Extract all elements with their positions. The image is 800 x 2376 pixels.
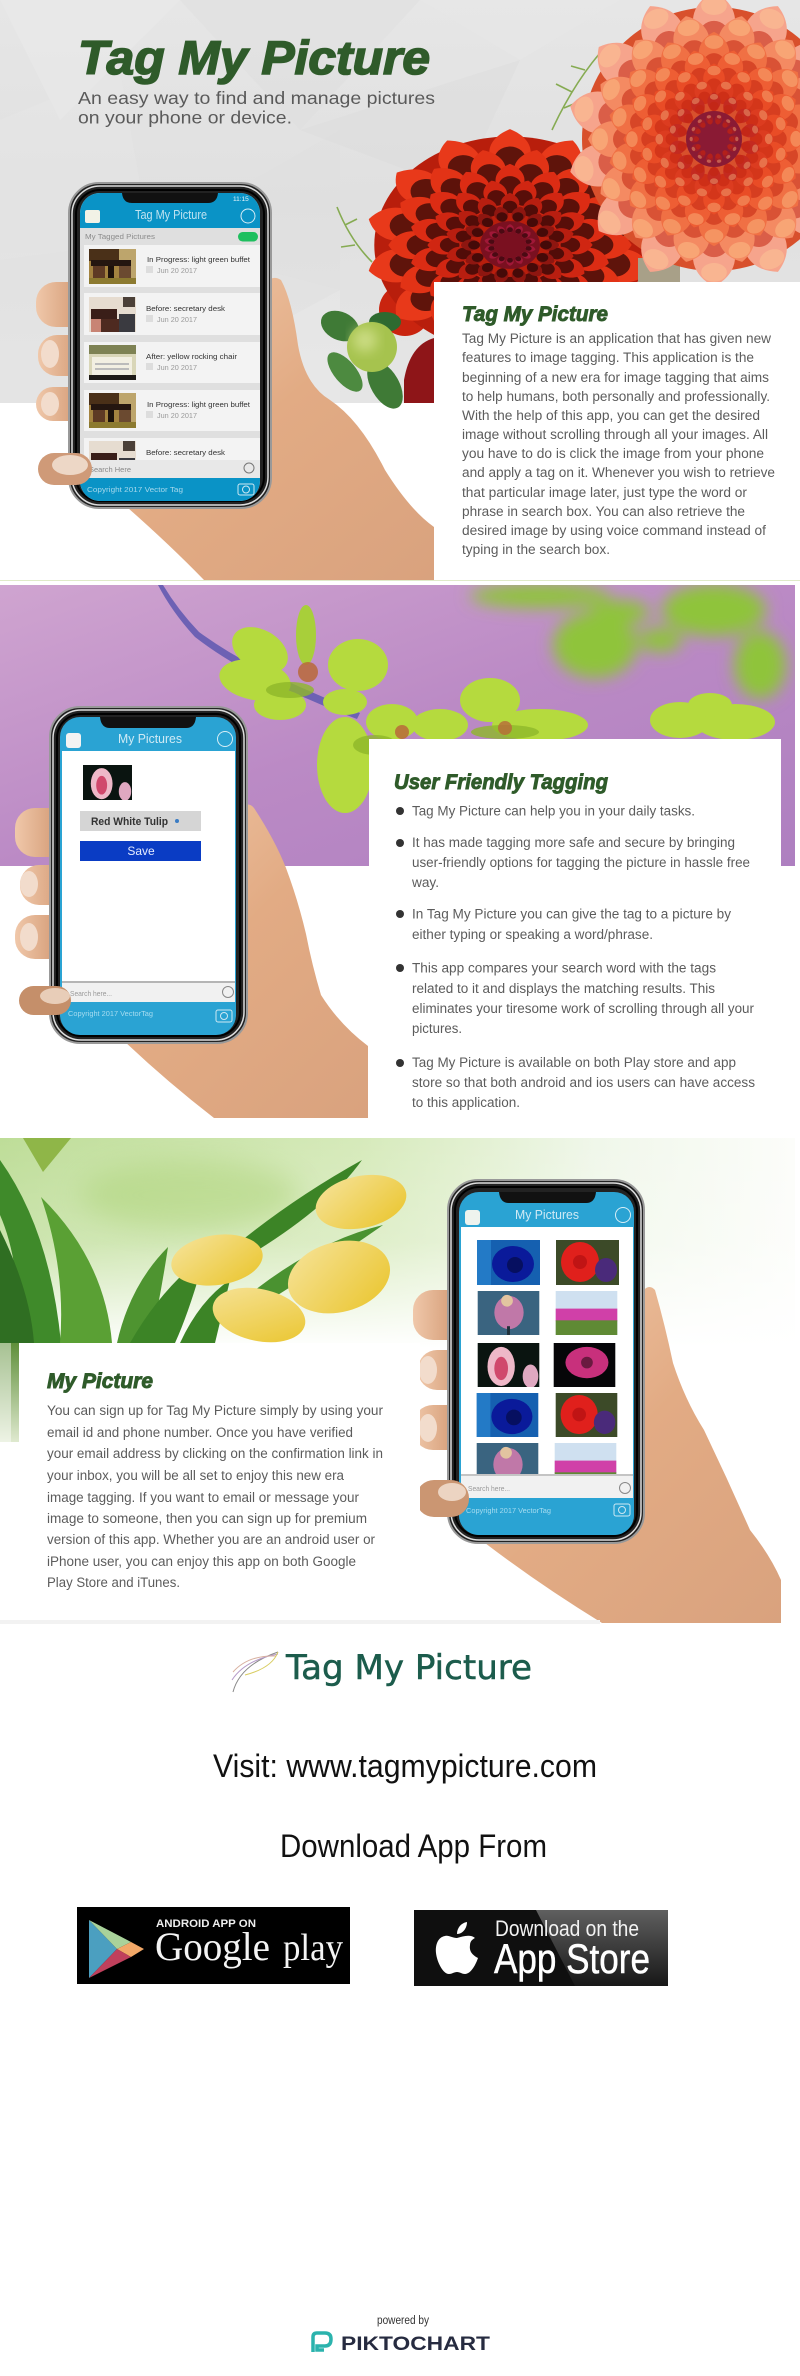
badge: App Store: Download on the bbox=[495, 1916, 639, 1941]
phone: tag entry screen: My Pictures bbox=[118, 732, 182, 746]
logo: Tag My Picture: Tag My Picture bbox=[285, 1648, 532, 1688]
body text bbox=[462, 331, 775, 557]
phone: tag entry screen: Red White Tulip bbox=[91, 816, 168, 828]
background: purple with green blossoms bbox=[0, 584, 795, 866]
body text: that particular image later, just type the word or bbox=[462, 485, 748, 500]
body text: version of this app. Whether you are an android user or bbox=[47, 1532, 376, 1547]
badge: Google Play: Google bbox=[155, 1924, 270, 1969]
body text bbox=[47, 1403, 384, 1590]
phone: tag entry screen: Copyright 2017 VectorTag bbox=[68, 1011, 153, 1018]
bullet list: This app compares your search word with the tags bbox=[412, 960, 716, 976]
badge: App Store: App Store bbox=[494, 1935, 650, 1982]
title: Tag My Picture bbox=[78, 31, 430, 84]
bullet list: way. bbox=[411, 875, 439, 890]
illustration: yellow tulips bbox=[168, 1167, 411, 1350]
bullet list: pictures. bbox=[412, 1021, 462, 1036]
phone: tagged pictures list: Before: secretary desk bbox=[146, 448, 225, 457]
phone: tagged pictures list: After: yellow rocking chair bbox=[146, 352, 237, 361]
illustration: hand holding phone bbox=[36, 278, 434, 580]
body text: features to image tagging. This application is the bbox=[462, 350, 754, 365]
body text: beginning of a new era for image tagging that aims bbox=[462, 370, 769, 385]
icon: apple bbox=[436, 1922, 478, 1974]
hero background: grey low-poly bbox=[0, 0, 800, 403]
heading: Tag My Picture bbox=[462, 303, 608, 326]
phone: tagged pictures list: Jun 20 2017 bbox=[157, 413, 197, 420]
phone: tagged pictures list bbox=[69, 183, 271, 508]
phone: picture grid: Search here... bbox=[468, 1484, 510, 1493]
illustration: hand holding phone bbox=[15, 804, 368, 1118]
bullet list bbox=[396, 804, 755, 1110]
website link: Visit: www.tagmypicture.com bbox=[213, 1748, 597, 1784]
badge: Google Play bbox=[77, 1907, 350, 1984]
illustration: thumb over phone bbox=[416, 1480, 469, 1517]
body text: you have to do is click the image from your phone bbox=[462, 446, 764, 461]
phone: tagged pictures list: Jun 20 2017 bbox=[157, 268, 197, 275]
heading: User Friendly Tagging bbox=[394, 770, 608, 794]
bullet list: user-friendly options for tagging the picture in hassle free bbox=[412, 855, 750, 870]
body text: Play Store and iTunes. bbox=[47, 1575, 180, 1590]
footer: Piktochart credit: PIKTOCHART bbox=[341, 2334, 490, 2355]
phone: picture grid bbox=[448, 1180, 644, 1543]
download heading: Download App From bbox=[280, 1828, 547, 1864]
panel: my picture text bbox=[19, 1343, 420, 1620]
icon: feather bbox=[232, 1652, 278, 1692]
phone: tagged pictures list: Before: secretary desk bbox=[146, 304, 225, 313]
bullet list: Tag My Picture is available on both Play store and app bbox=[412, 1055, 736, 1070]
phone: tagged pictures list: 11:15 bbox=[233, 196, 249, 203]
body text: desired image by using voice command instead of bbox=[462, 523, 766, 538]
body text: and apply a tag on it. Whenever you wish to retrieve bbox=[462, 465, 775, 480]
badge: Google Play: play bbox=[283, 1927, 343, 1969]
illustration: red dahlia bbox=[368, 129, 643, 336]
heading: My Picture bbox=[47, 1370, 153, 1393]
bullet list: store so that both android and ios users can have access bbox=[412, 1075, 755, 1090]
phone: tagged pictures list: Copyright 2017 Vector Tag bbox=[87, 485, 183, 494]
phone: tag entry screen: Save bbox=[127, 844, 155, 858]
body text: Tag My Picture is an application that has given new bbox=[462, 331, 771, 346]
body text: typing in the search box. bbox=[462, 542, 610, 557]
illustration: tulip leaves bbox=[0, 1138, 383, 1442]
body text: email id and phone number. Once you have verified bbox=[47, 1425, 353, 1440]
illustration: leaves and green bud bbox=[316, 305, 434, 415]
divider line bbox=[0, 580, 800, 581]
phone: tagged pictures list: Jun 20 2017 bbox=[157, 365, 197, 372]
icon: leaf sprigs bbox=[337, 45, 607, 262]
bullet list: related to it and displays the matching results. This bbox=[412, 981, 715, 996]
footer: Piktochart credit bbox=[313, 2315, 490, 2355]
illustration: hand holding phone bbox=[413, 1287, 781, 1623]
phone: tagged pictures list: In Progress: light green buffet bbox=[147, 400, 251, 409]
subtitle: An easy way to find and manage pictures bbox=[78, 88, 435, 108]
image grid bbox=[477, 1240, 619, 1487]
badge: Google Play: ANDROID APP ON bbox=[156, 1918, 256, 1930]
phone: tagged pictures list: My Tagged Pictures bbox=[85, 232, 155, 241]
panel: user friendly tagging section bbox=[0, 584, 800, 1118]
body text: You can sign up for Tag My Picture simply by using your bbox=[47, 1403, 384, 1418]
body text: image without scrolling through all your images. All bbox=[462, 427, 768, 442]
bullet list: to this application. bbox=[412, 1095, 520, 1110]
body text: iPhone user, you can enjoy this app on both Google bbox=[47, 1554, 356, 1569]
bullet list: either typing or speaking a word/phrase. bbox=[412, 927, 653, 942]
body text: phrase in search box. You can also retrieve the bbox=[462, 504, 745, 519]
icon: Piktochart mark bbox=[313, 2333, 331, 2352]
body text: your email address by clicking on the confirmation link in bbox=[47, 1446, 383, 1461]
bullet list: It has made tagging more safe and secure by bringing bbox=[412, 835, 735, 850]
panel: Tag My Picture description bbox=[434, 282, 800, 580]
panel: user friendly tagging text bbox=[369, 739, 800, 1118]
phone: tagged pictures list: Jun 20 2017 bbox=[157, 317, 197, 324]
bullet list: Tag My Picture can help you in your daily tasks. bbox=[412, 804, 695, 818]
body text: With the help of this app, you can get the desired bbox=[462, 408, 760, 423]
phone: tag entry screen bbox=[50, 707, 247, 1043]
panel: my picture section bbox=[0, 1138, 795, 1624]
background: soft green fading to white bbox=[0, 1138, 795, 1348]
phone: tag entry screen: Search here... bbox=[70, 989, 112, 998]
subtitle bbox=[78, 88, 435, 128]
bullet list: In Tag My Picture you can give the tag to a picture by bbox=[412, 906, 731, 922]
footer: Piktochart credit: powered by bbox=[377, 2315, 429, 2327]
illustration: thumb over phone bbox=[19, 986, 71, 1015]
body text: image to someone, then you can sign up for premium bbox=[47, 1511, 367, 1526]
badge: App Store bbox=[414, 1910, 668, 1986]
phone: picture grid: My Pictures bbox=[515, 1208, 579, 1222]
illustration: coral dahlia bbox=[562, 0, 800, 290]
phone: tagged pictures list: Search Here bbox=[89, 465, 131, 474]
phone: picture grid: Copyright 2017 VectorTag bbox=[466, 1508, 551, 1515]
body text: image tagging. If you want to email or message your bbox=[47, 1490, 360, 1505]
body text: to help humans, both personally and professionally. bbox=[462, 389, 770, 404]
body text: your inbox, you will be all set to enjoy this new era bbox=[47, 1468, 345, 1483]
illustration: thumb over phone bbox=[38, 453, 92, 485]
subtitle: on your phone or device. bbox=[78, 108, 292, 128]
bullet list: eliminates your tiresome work of scrolling through all your bbox=[412, 1001, 755, 1016]
phone: tagged pictures list: In Progress: light green buffet bbox=[147, 255, 251, 264]
panel: hero section bbox=[0, 0, 800, 580]
phone: tagged pictures list: Tag My Picture bbox=[135, 208, 207, 222]
